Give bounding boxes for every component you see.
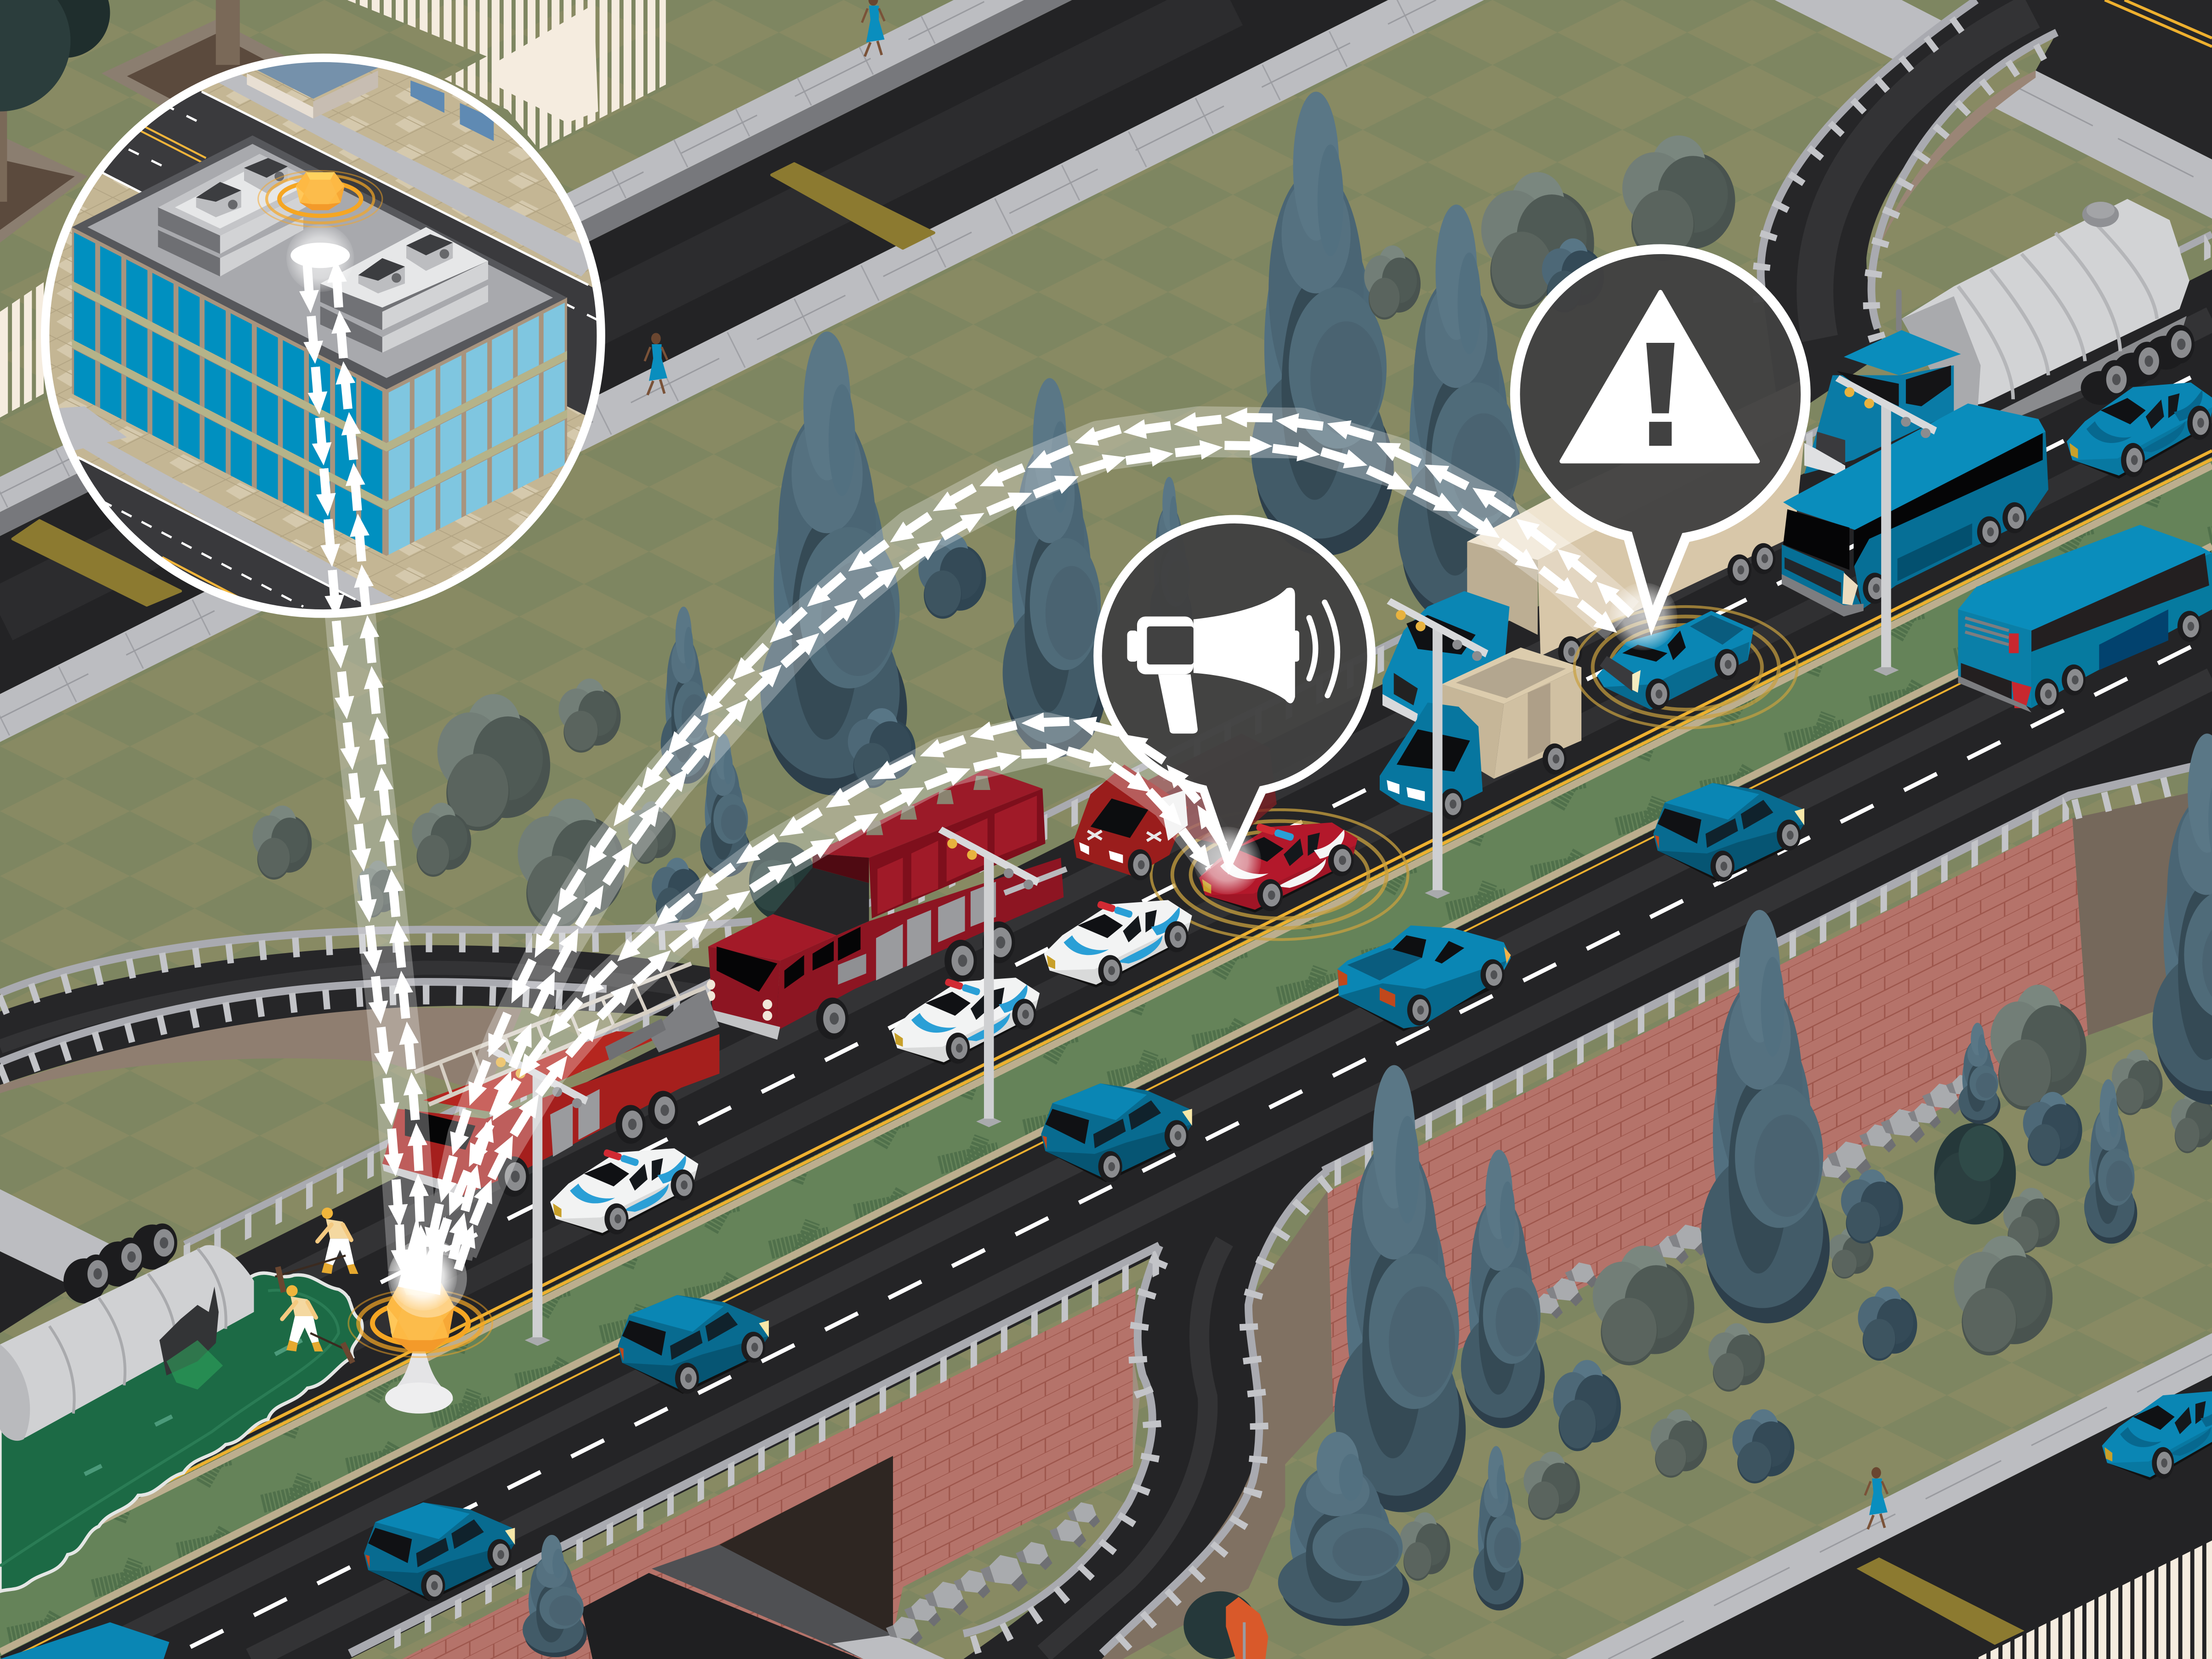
pedestal beacon hub [348,1239,492,1414]
inset road south [78,456,361,609]
police car 3 [1044,900,1192,988]
speed bump far right [772,164,934,248]
picket fence top [0,0,666,418]
underpass [581,1456,945,1659]
blue sedan lower road 4 [364,1502,515,1601]
pedestrian on far sidewalk [645,333,667,395]
blue van with tan box [1380,648,1581,820]
speed bump far left [13,521,181,605]
ladder fire truck [382,964,719,1197]
police car 2 [892,977,1040,1065]
lamp posts [487,375,1937,1346]
inset neighbouring house [247,58,494,141]
blue pickup lower road [1337,926,1511,1031]
arrows: building link up [336,254,423,1291]
arrows: truck link outbound lower row [449,446,1622,1277]
inset rooftop air handlers right [358,234,453,294]
blue sports car bottom right [2102,1391,2212,1480]
red van [1074,765,1188,881]
left curved overpass [0,921,752,1093]
blue pickup with sensor rings [1575,607,1797,728]
inset rooftop beacon [258,170,382,292]
green chemical spill [0,1273,362,1591]
inset rooftop platform left [158,154,323,277]
arc glow at pickup [1609,583,1677,650]
left stub road and sidewalk [0,1189,127,1333]
speech bubble: megaphone alert [1097,519,1371,864]
blue tanker truck [1804,199,2195,477]
link arcs translucent bands [322,282,1622,1270]
retaining walls [402,790,2212,1659]
arrows: building link down [307,264,402,1291]
exit ramp [963,1164,1333,1659]
blue bus right [1958,525,2212,712]
fire engine [707,769,1067,1040]
upper carriageway [0,269,2212,1560]
blue sedan lower road 2 [1041,1084,1192,1182]
arrows: red car link inbound upper row [430,722,1241,1277]
median [0,451,2212,1659]
lower ground vegetation [523,733,2212,1657]
police car 1 [550,1148,698,1236]
top left planter and tree [0,0,367,243]
hidden truck seen through bubble [1129,733,1277,847]
ramp guard rails [963,1171,1327,1653]
arc glow at red car [1194,827,1261,894]
top right roads [1761,0,2212,423]
far road with sidewalks [0,0,1484,742]
zoom inset: connected building [42,13,601,621]
trees behind highway [252,92,1735,930]
inset building facades [72,227,567,556]
red sports car with sensor rings [1151,810,1408,939]
upper guard rail [185,234,2212,1258]
inset rooftop air handlers left [196,158,288,217]
blue sedan lower road 3 [618,1295,769,1394]
arrows: red car link outbound lower row [454,753,1220,1287]
blue sports car top right [2067,382,2212,479]
rock rubble along walls [886,1075,1979,1645]
blue sedan lower road 1 [1653,783,1804,882]
hub glow over arrow convergence [389,1213,457,1311]
icon: warning triangle [1562,292,1758,461]
inset rooftop platform right [320,227,488,352]
speech bubble: warning alert [1515,249,1806,621]
workers [275,1208,358,1363]
blue bus bottom left [0,1622,169,1659]
icon: megaphone [1127,588,1337,733]
inset sidewalk and curb [45,70,601,609]
inset road north [102,91,597,415]
arrows: truck link inbound upper row [427,418,1650,1270]
inset building roof [72,136,567,389]
lower carriageway [11,559,2212,1659]
large blue bus [1782,403,2048,616]
overturned tanker [0,1223,254,1441]
tan trailer truck [1382,378,1806,722]
lower guard rails [350,763,2212,1653]
orange road sign and bush at bottom [1183,1591,1268,1659]
bottom right road [1566,1333,2212,1659]
pedestrian bottom right [1865,1467,1888,1529]
pedestrian top [862,0,885,57]
